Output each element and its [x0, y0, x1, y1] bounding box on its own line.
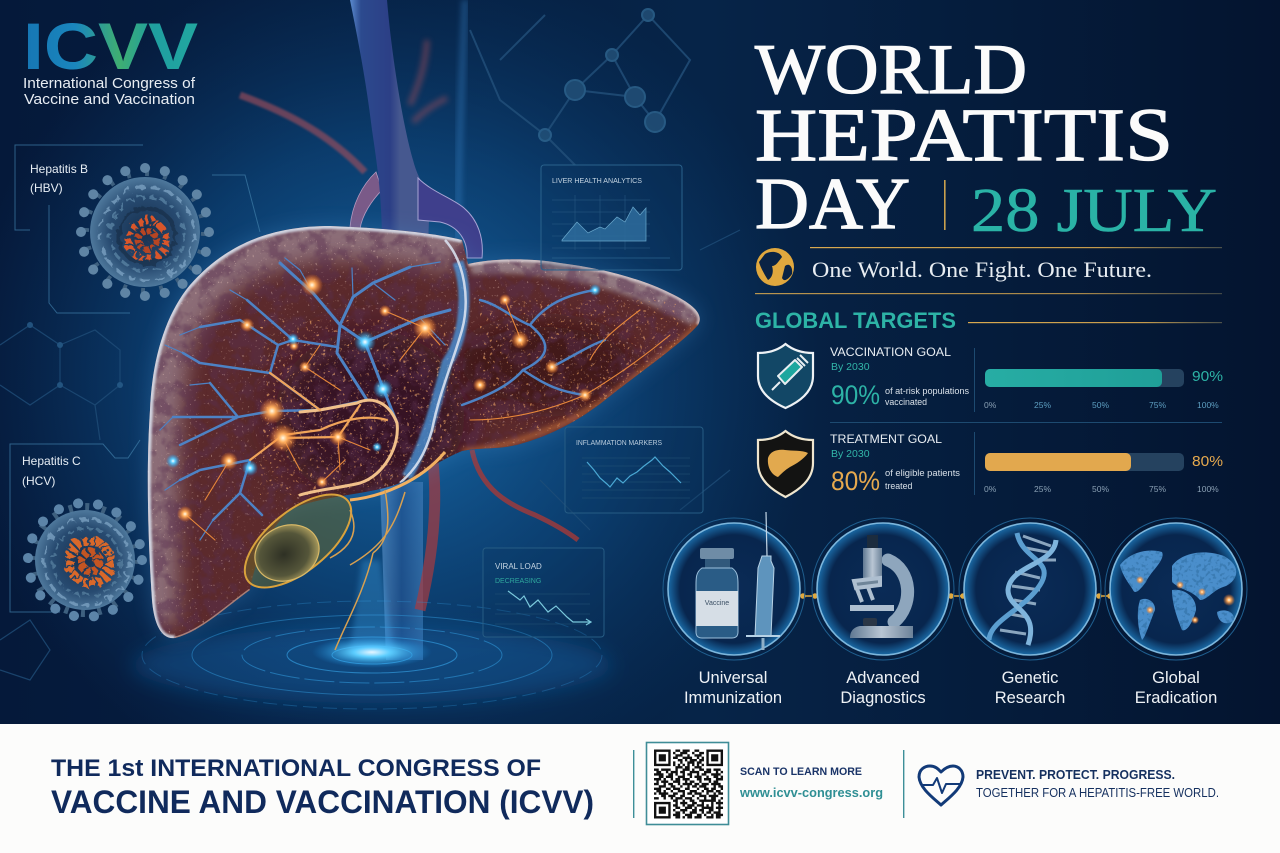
panel: treatment goal: 80%	[1192, 453, 1223, 470]
connectors between circles	[801, 594, 1112, 598]
falciform ligament	[407, 262, 464, 477]
heading: global targets: GLOBAL TARGETS	[755, 308, 956, 333]
progress bar 80%	[985, 453, 1184, 471]
background glow behind liver	[0, 0, 820, 725]
molecule network left	[0, 230, 740, 680]
panel: viral load: DECREASING	[495, 578, 541, 585]
panel: vaccination goal	[758, 344, 1223, 412]
panel: vaccination goal: 90%	[1192, 368, 1223, 385]
logo ICVV	[23, 9, 198, 108]
axis ticks: 25%	[1034, 400, 1051, 410]
callout: Hepatitis C: (HCV)	[22, 474, 55, 488]
axis ticks: 50%	[1092, 400, 1109, 410]
orange and cream bile network	[185, 300, 670, 540]
axis ticks: 0%	[984, 484, 997, 494]
title: WORLD	[755, 31, 1027, 109]
icon: vial	[696, 548, 738, 638]
virus: Hepatitis C	[28, 503, 142, 617]
decreasing line	[508, 591, 591, 625]
axis ticks: 0%	[984, 400, 997, 410]
progress bar 90%	[985, 369, 1184, 387]
scan text: SCAN TO LEARN MORE	[740, 766, 862, 778]
tagline footer: PREVENT. PROTECT. PROGRESS.	[976, 767, 1175, 782]
callout: Hepatitis B: Hepatitis B	[30, 162, 88, 176]
panel: inflammation markers: INFLAMMATION MARKERS	[576, 438, 662, 447]
icon: heart	[919, 766, 963, 805]
axis ticks	[984, 400, 1219, 410]
vena cava and blood vessels	[240, 0, 578, 660]
callout: Hepatitis B	[15, 145, 260, 313]
logo ICVV: ICVV	[23, 9, 198, 83]
panel: vaccination goal: By 2030	[831, 361, 870, 373]
panel: treatment goal: 80%	[831, 466, 880, 496]
callout: Hepatitis C: Hepatitis C	[22, 454, 81, 468]
axis ticks: 75%	[1149, 484, 1166, 494]
footer heading: THE 1st INTERNATIONAL CONGRESS OF	[51, 755, 541, 782]
icon: dna	[989, 533, 1056, 645]
liver illustration	[140, 220, 710, 660]
circle: genetic research	[959, 518, 1101, 660]
icon: liver shield	[758, 431, 813, 497]
panel: inflammation markers	[565, 427, 703, 513]
icon: vial: Vaccine	[705, 600, 729, 607]
callout: Hepatitis C	[10, 440, 140, 612]
logo ICVV: International Congress of	[23, 76, 196, 92]
panel: viral load	[483, 548, 604, 637]
panel: vaccination goal: vaccinated	[885, 397, 927, 407]
footer band	[0, 724, 1280, 853]
panel: vaccination goal: 90%	[831, 380, 880, 410]
circle: global eradication	[1105, 518, 1247, 660]
tagline footer	[976, 767, 1219, 800]
panel: viral load: VIRAL LOAD	[495, 562, 542, 571]
axis ticks: 25%	[1034, 484, 1051, 494]
label: Universal	[699, 669, 767, 687]
panel: vaccination goal: of at-risk populations	[885, 386, 970, 396]
QR code	[646, 742, 728, 824]
icon: vaccine shield	[758, 344, 813, 408]
blue hepatic vein tree	[160, 258, 605, 540]
circle: universal immunization	[663, 512, 805, 660]
panel: treatment goal: By 2030	[831, 448, 870, 460]
scan text	[739, 766, 883, 800]
lobe shading	[275, 330, 465, 500]
molecule network top	[470, 9, 690, 165]
title: DAY	[755, 163, 910, 244]
panel: treatment goal	[758, 431, 1223, 497]
gallbladder	[229, 477, 367, 605]
text: Immunization	[684, 689, 782, 707]
label: Global	[1152, 669, 1200, 687]
line chart	[587, 457, 681, 487]
callout: Hepatitis B: (HBV)	[30, 181, 63, 195]
footer heading	[51, 755, 594, 820]
label: Advanced	[846, 669, 920, 687]
scan text: www.icvv-congress.org	[739, 785, 883, 800]
title	[755, 31, 1217, 245]
circle: advanced diagnostics	[812, 518, 954, 660]
axis ticks: 100%	[1197, 400, 1219, 410]
tagline: One World. One Fight. One Future.	[812, 257, 1152, 282]
bile ducts	[330, 452, 445, 650]
axis ticks: 100%	[1197, 484, 1219, 494]
icon: world map	[1120, 550, 1236, 640]
icon: microscope	[850, 535, 913, 638]
axis ticks	[984, 484, 1219, 494]
title: 28 JULY	[971, 177, 1217, 245]
text: Research	[995, 689, 1065, 707]
panel: liver health analytics: LIVER HEALTH ANALYTICS	[552, 176, 642, 185]
panel: liver health analytics	[541, 165, 682, 270]
holographic base rings	[132, 560, 612, 709]
panel: vaccination goal: VACCINATION GOAL	[830, 345, 951, 359]
title: HEPATITIS	[755, 94, 1173, 177]
label: Genetic	[1002, 669, 1058, 687]
panel: treatment goal: treated	[885, 481, 912, 491]
divider gold	[810, 247, 1222, 248]
area chart	[562, 207, 646, 241]
panel: treatment goal: TREATMENT GOAL	[830, 432, 942, 446]
tagline footer: TOGETHER FOR A HEPATITIS-FREE WORLD.	[976, 786, 1219, 800]
axis ticks: 50%	[1092, 484, 1109, 494]
text: Eradication	[1135, 689, 1217, 707]
panel: treatment goal: of eligible patients	[885, 468, 961, 478]
glowing hotspots	[166, 274, 601, 522]
footer heading: VACCINE AND VACCINATION (ICVV)	[51, 784, 594, 820]
logo ICVV: Vaccine and Vaccination	[24, 92, 195, 108]
glass rim	[148, 226, 462, 638]
axis ticks: 75%	[1149, 400, 1166, 410]
virus: Hepatitis B	[81, 168, 209, 296]
icon: globe	[756, 248, 794, 286]
icon: syringe	[746, 512, 780, 650]
text: Diagnostics	[840, 689, 926, 707]
